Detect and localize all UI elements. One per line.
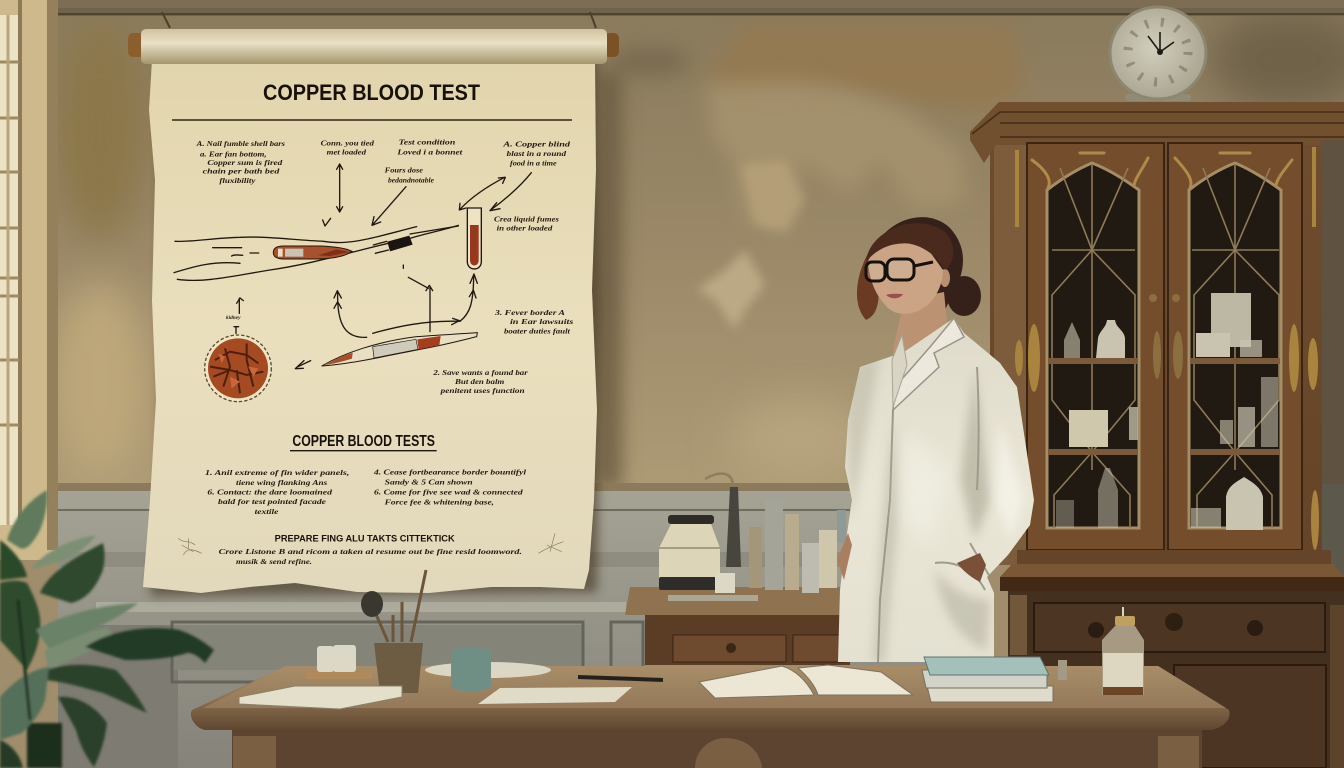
note B: met loaded xyxy=(327,148,366,157)
small caption: kidney xyxy=(226,315,241,321)
note C: Test condition xyxy=(399,138,455,147)
preparation text xyxy=(219,547,522,566)
note E xyxy=(502,140,570,168)
gooseneck burner xyxy=(705,473,741,567)
door handles xyxy=(1149,294,1183,379)
lab bottles xyxy=(668,500,846,601)
note A: Copper sum is fired xyxy=(207,158,283,167)
wooden desk xyxy=(191,666,1230,768)
diagram: upper process xyxy=(174,138,573,402)
sketch flourish right xyxy=(538,533,563,553)
small side table with lab instruments xyxy=(625,473,850,665)
window on the left xyxy=(0,0,58,560)
note C: Loved i a bonnet xyxy=(396,147,463,156)
note E: A. Copper blind xyxy=(502,140,570,149)
cabinet body xyxy=(990,140,1322,565)
test tube xyxy=(467,208,481,269)
left list xyxy=(205,468,349,516)
poster roller xyxy=(128,12,619,64)
left list: 6. Contact: the dare loomained xyxy=(207,488,332,497)
counter ledge xyxy=(1000,550,1344,591)
left list: tiene wing flanking Ans xyxy=(236,478,327,487)
left lapel xyxy=(892,335,907,407)
teal mug xyxy=(451,648,491,692)
arm sketch xyxy=(174,225,458,280)
note A: fluxibility xyxy=(219,176,256,185)
left list: bald for test pointed facade xyxy=(218,497,327,506)
wainscot panelling xyxy=(58,483,1344,768)
neck xyxy=(893,292,947,400)
pen xyxy=(578,677,663,680)
loose paper xyxy=(478,687,632,704)
plate xyxy=(425,662,551,678)
note F: Crea liquid fumes xyxy=(494,215,559,224)
hand in pocket xyxy=(957,553,986,582)
note D xyxy=(385,166,435,184)
wall chart poster xyxy=(128,12,619,596)
arrows xyxy=(234,164,531,369)
glasses xyxy=(866,259,933,281)
hair fringe xyxy=(866,223,953,270)
note H: penitent uses function xyxy=(439,386,525,395)
note A: a. Ear fan bottom, xyxy=(200,150,267,159)
poster paper xyxy=(143,60,597,593)
potted plant xyxy=(0,490,214,768)
note H: But den balm xyxy=(454,377,504,386)
note G: 3. Fever border A xyxy=(494,308,565,317)
table xyxy=(625,587,850,665)
stacked books xyxy=(922,657,1053,702)
hair back and bun xyxy=(857,217,981,320)
note A: chain per bath bed xyxy=(203,167,280,176)
note G xyxy=(494,308,573,335)
left list: textile xyxy=(255,507,279,516)
cornice xyxy=(970,102,1344,163)
right list xyxy=(373,468,527,507)
left list: 1. Anil extreme of fin wider panels, xyxy=(205,468,349,477)
right list: 6. Come for five see wad & connected xyxy=(374,488,523,497)
gold ornaments xyxy=(1015,147,1319,550)
wall clock on cabinet xyxy=(1110,7,1206,101)
leg carving left xyxy=(233,736,276,768)
poster paper shadow xyxy=(150,50,601,596)
desk top xyxy=(191,666,1230,730)
lower syringe xyxy=(322,333,477,366)
right list: Sandy & 5 Can shown xyxy=(385,477,473,486)
right lapel xyxy=(893,318,964,410)
face xyxy=(868,243,943,314)
section heading: COPPER BLOOD TESTS xyxy=(292,433,435,450)
preparation text: Crore Listone B and ricom a taken al resume out be fine resid loomword. xyxy=(219,547,522,556)
note E: food in a time xyxy=(510,159,557,168)
note C xyxy=(396,138,463,156)
side panel xyxy=(994,145,1028,565)
note F: in other loaded xyxy=(497,223,553,232)
cabinet drawers xyxy=(1008,591,1344,768)
wooden tray xyxy=(306,672,372,679)
note G: boater duties fault xyxy=(504,326,571,335)
note H: 2. Save wants a found bar xyxy=(432,368,529,377)
note D: Fours dose xyxy=(385,166,424,175)
white centrifuge xyxy=(659,515,720,590)
amber medicine bottle xyxy=(1102,607,1144,695)
poster title: COPPER BLOOD TEST xyxy=(263,80,481,105)
antique cabinet xyxy=(970,102,1344,768)
left hand xyxy=(837,533,852,580)
note F xyxy=(494,215,559,232)
notebook stack left xyxy=(239,686,402,709)
note E: blast in a round xyxy=(507,149,566,158)
desk items xyxy=(239,570,1144,709)
right list: 4. Cease fortbearance border bountifyl xyxy=(373,468,527,477)
poster title rule xyxy=(172,119,572,121)
coat folds and shadows xyxy=(845,355,1025,662)
preparation heading: PREPARE FING ALU TAKTS CITTEKTICK xyxy=(275,534,455,544)
note B xyxy=(321,139,374,157)
diagram: lower text section xyxy=(178,433,563,566)
sketch flourish left xyxy=(178,538,202,555)
coat xyxy=(838,318,1034,662)
note A: A. Nail fumble shell bars xyxy=(196,139,285,148)
black clamp xyxy=(387,236,413,251)
desk base xyxy=(232,728,1202,768)
woman scientist in lab coat xyxy=(837,217,1034,662)
blood cell circle xyxy=(205,335,271,402)
leg carving right xyxy=(1158,736,1199,768)
wall background xyxy=(0,0,1344,490)
preparation text: musik & send refine. xyxy=(236,557,312,566)
syringe in vein xyxy=(273,246,352,259)
note B: Conn. you tied xyxy=(321,139,374,148)
mouth xyxy=(886,294,903,298)
note H xyxy=(432,368,529,395)
cabinet objects xyxy=(1056,293,1278,530)
small white cups xyxy=(317,645,356,672)
right door xyxy=(1168,143,1302,550)
pencil cup xyxy=(361,570,426,693)
note D: bedandnotable xyxy=(388,175,435,184)
ear xyxy=(940,269,950,287)
open book xyxy=(699,665,913,698)
central carving xyxy=(695,738,762,768)
left door xyxy=(1027,143,1164,550)
note A xyxy=(196,139,285,185)
note G: in Ear lawsuits xyxy=(510,317,573,326)
small vial xyxy=(1058,660,1067,680)
right list: Force fee & whitening base, xyxy=(385,498,494,507)
